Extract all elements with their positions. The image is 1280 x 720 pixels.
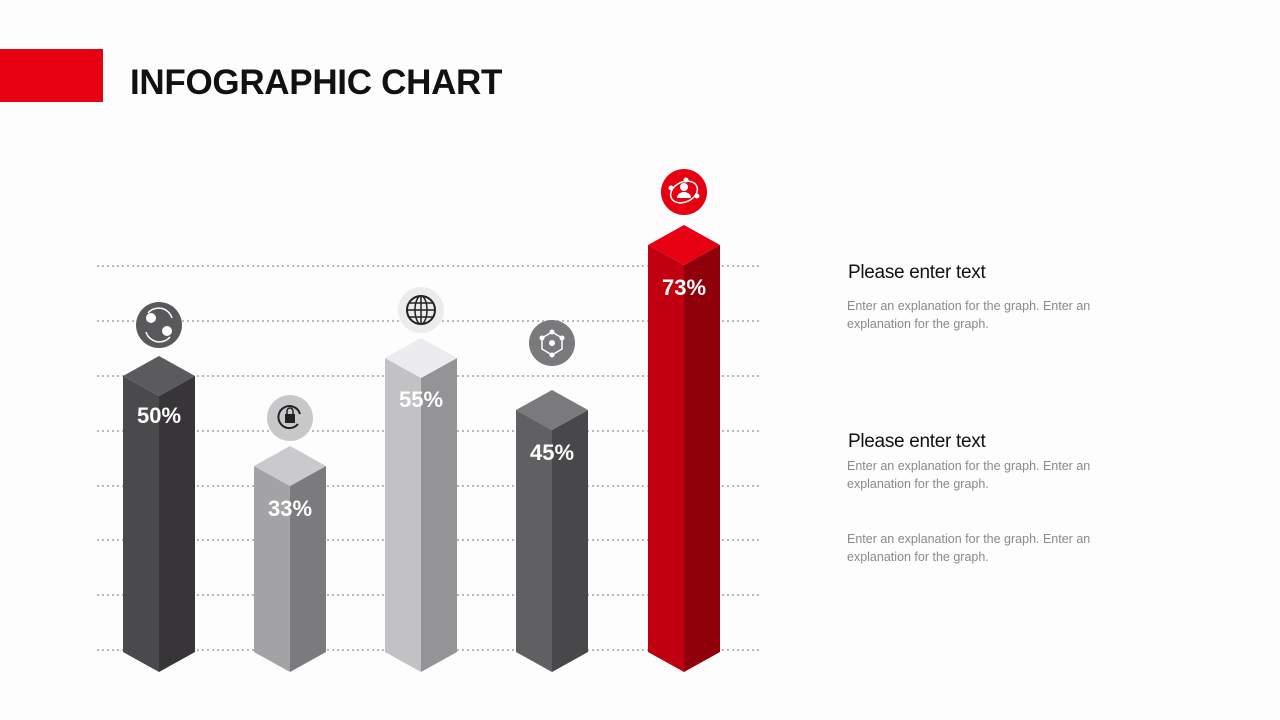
bar: 55%: 55%: [399, 387, 443, 412]
text block 1: Please enter text: [848, 262, 985, 283]
icon: lock refresh: [267, 395, 313, 441]
text block 2: [847, 431, 1090, 491]
bar: 50%: [123, 356, 195, 672]
bar: 73%: [648, 225, 720, 672]
text block 2: Enter an explanation for the graph. Enter an explanation for the graph.: [847, 459, 1090, 491]
icon: user orbit: [661, 169, 707, 215]
bar: 73%: 73%: [662, 275, 706, 300]
title: INFOGRAPHIC CHART: [130, 63, 502, 102]
icon: people exchange: [136, 302, 182, 348]
bar: 50%: 50%: [137, 403, 181, 428]
text block 2: Please enter text: [848, 431, 985, 452]
icon: network: [529, 320, 575, 366]
icon: globe: [398, 287, 444, 333]
bar: 33%: 33%: [268, 496, 312, 521]
bar: 55%: [385, 338, 457, 672]
red accent block: [0, 49, 103, 102]
text block 1: Enter an explanation for the graph. Enter an explanation for the graph.: [847, 299, 1090, 331]
text block 3: Enter an explanation for the graph. Enter an explanation for the graph.: [847, 532, 1090, 564]
bar: 33%: [254, 446, 326, 672]
bar: 45%: 45%: [530, 440, 574, 465]
bar: 45%: [516, 390, 588, 672]
text block 1: [847, 262, 1090, 331]
